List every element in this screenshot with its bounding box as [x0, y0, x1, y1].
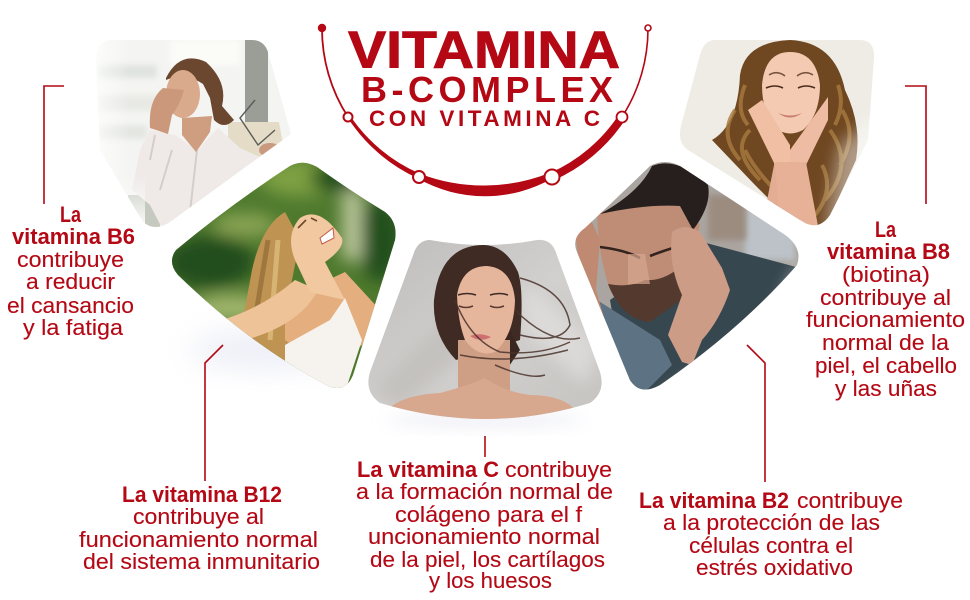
photo shadow: soft glow under woman with windblown hair: [385, 412, 585, 428]
text block: vitamin B12: contribuye al: [133, 504, 264, 529]
text block: vitamin B2: [639, 488, 903, 580]
title: CON VITAMINA C: CON VITAMINA C: [369, 106, 600, 131]
photo: joyful woman outdoors: [172, 162, 396, 388]
text block: vitamin B6: contribuye: [17, 247, 124, 272]
photo: woman with eye strain: [98, 40, 291, 227]
text block: vitamin C: a la formación normal de: [356, 479, 613, 504]
photo: man with headache: [575, 162, 798, 390]
title badge: arc with nodes and heading: [318, 22, 651, 196]
text block: vitamin C: uncionamiento normal: [368, 524, 600, 549]
text block: vitamin C: [356, 457, 613, 593]
text block: vitamin C: y los huesos: [429, 568, 552, 593]
text block: vitamin B8: [806, 217, 965, 401]
text block: vitamin B8: contribuye al: [820, 285, 951, 310]
title: B-COMPLEX: B-COMPLEX: [361, 69, 613, 110]
photo: woman touching her face: [680, 40, 874, 226]
text block: vitamin B8: piel, el cabello: [815, 353, 957, 378]
text block: vitamin B12: funcionamiento normal: [79, 527, 318, 552]
text block: vitamin B2: contribuye: [797, 488, 903, 513]
text block: vitamin B12: [79, 482, 320, 574]
text block: vitamin B8: (biotina): [842, 262, 930, 287]
photo: woman with windblown hair: [368, 240, 602, 419]
text block: vitamin C: La vitamina C: [357, 457, 499, 482]
text block: vitamin B6: La: [60, 202, 82, 227]
text block: vitamin B8: normal de la: [822, 330, 950, 355]
text block: vitamin C: colágeno para el f: [395, 502, 583, 527]
text block: vitamin B12: La vitamina B12: [122, 482, 282, 507]
title: VITAMINA: VITAMINA: [348, 22, 620, 80]
text block: vitamin B8: La: [875, 217, 897, 242]
text block: vitamin B8: funcionamiento: [806, 307, 965, 332]
text block: vitamin B12: del sistema inmunitario: [83, 549, 320, 574]
text block: vitamin B6: [7, 202, 135, 340]
connector: vitamin B2: [747, 345, 765, 482]
text block: vitamin B6: y la fatiga: [23, 315, 124, 340]
text block: vitamin B2: La vitamina B2: [639, 488, 789, 513]
text block: vitamin B2: estrés oxidativo: [696, 555, 853, 580]
text block: vitamin B8: vitamina B8: [827, 239, 950, 264]
photo shadow: soft glow under woman outdoors: [190, 330, 340, 370]
text block: vitamin C: contribuye: [505, 457, 612, 482]
text block: vitamin B2: células contra el: [689, 533, 853, 558]
connector: vitamin B12: [205, 345, 223, 481]
text block: vitamin B2: a la protección de las: [663, 510, 880, 535]
text block: vitamin B6: a reducir: [26, 269, 115, 294]
text block: vitamin B6: el cansancio: [7, 293, 134, 318]
text block: vitamin B6: vitamina B6: [12, 224, 135, 249]
connector: vitamin B8: [905, 86, 926, 204]
connector: vitamin B6: [44, 86, 64, 204]
text block: vitamin C: de la piel, los cartílagos: [370, 547, 605, 572]
text block: vitamin B8: y las uñas: [835, 376, 937, 401]
arc decoration: [318, 24, 651, 196]
connector: vitamin C: [484, 436, 486, 457]
